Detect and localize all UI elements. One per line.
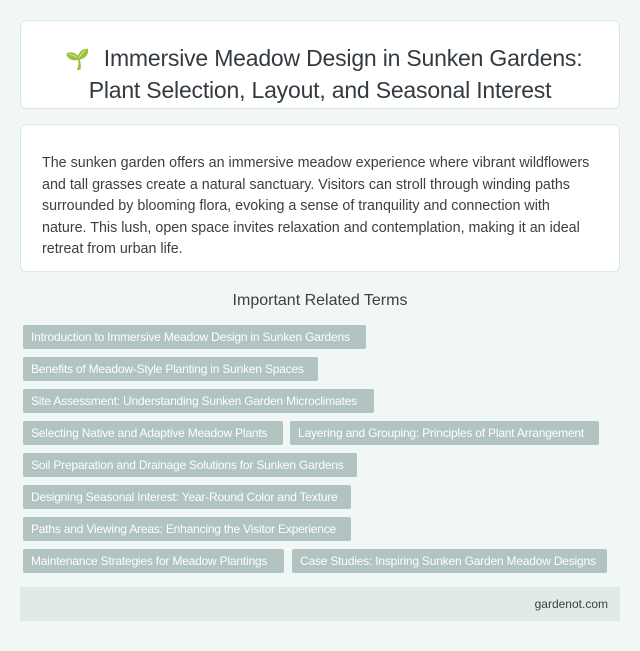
icon: sprout: 🌱 (65, 49, 90, 71)
tag 6: Soil Preparation and Drainage Solutions for Sunken Gardens (31, 458, 344, 472)
tag 5: Layering and Grouping: Principles of Plant Arrangement (298, 426, 584, 440)
tag 3: Site Assessment: Understanding Sunken Garden Microclimates (31, 394, 357, 408)
tag 8: Paths and Viewing Areas: Enhancing the Visitor Experience (31, 522, 336, 536)
tag 9: Maintenance Strategies for Meadow Plantings (31, 554, 267, 568)
tag 8 (23, 517, 351, 541)
tag 7: Designing Seasonal Interest: Year-Round Color and Texture (31, 490, 338, 504)
title: Immersive Meadow Design in Sunken Gardens: (104, 45, 582, 71)
tag 10 (292, 549, 607, 573)
tag 7 (23, 485, 351, 509)
description panel (20, 124, 620, 272)
heading: related terms: Important Related Terms (233, 292, 407, 309)
footer (20, 587, 620, 621)
tag 5 (290, 421, 599, 445)
title panel (20, 20, 620, 109)
tag 1: Introduction to Immersive Meadow Design in Sunken Gardens (31, 330, 350, 344)
description text: The sunken garden offers an immersive meadow experience where vibrant wildflowers and tall grasses create a natural sanctuary. Visitors can stroll through winding paths surrounded by blooming flora, evoking a sense of tranquility and connection with nature. This lush, open space invites relaxation and contemplation, making it an ideal retreat from urban life. (42, 155, 589, 257)
tag 1 (23, 325, 366, 349)
tag 10: Case Studies: Inspiring Sunken Garden Meadow Designs (300, 554, 596, 568)
tag 3 (23, 389, 374, 413)
tag 6 (23, 453, 357, 477)
tag 9 (23, 549, 284, 573)
tag 4: Selecting Native and Adaptive Meadow Plants (31, 426, 267, 440)
tag 2 (23, 357, 318, 381)
title: Plant Selection, Layout, and Seasonal Interest (89, 77, 551, 103)
tag 2: Benefits of Meadow-Style Planting in Sunken Spaces (31, 362, 304, 376)
tag 4 (23, 421, 283, 445)
title (65, 45, 582, 103)
footer text: gardenot.com (535, 597, 608, 611)
